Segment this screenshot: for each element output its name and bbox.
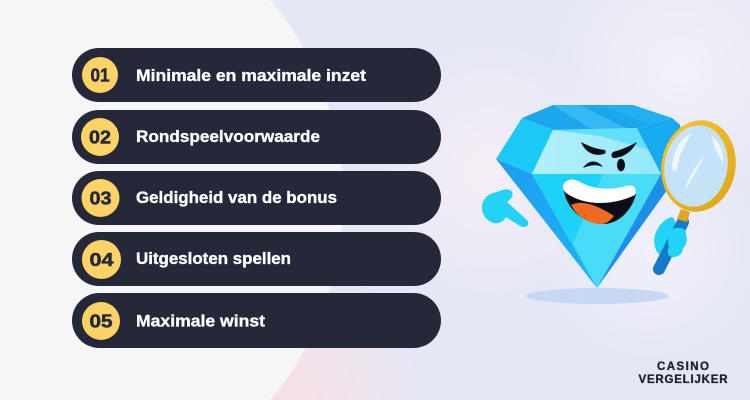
top band [522,105,680,130]
right upper facet [637,118,684,174]
list row 3: Geldigheid van de bonus [136,188,337,207]
shadow under diamond [526,288,668,304]
main lower facet [532,174,661,288]
magnifier [654,114,743,218]
left lower strip [496,159,597,288]
diamond body [496,105,684,288]
list row 2: 02 [89,127,111,147]
face: mouth [563,179,636,224]
list row 5: 05 [90,311,112,331]
list row 4: Uitgesloten spellen [136,249,291,268]
left light panel [0,0,343,400]
list row 4: 04 [90,250,114,270]
centre pale facet [532,128,661,174]
right lower strip [597,172,680,288]
list row 1 [72,48,441,102]
left upper facet [496,118,553,174]
list row 5: Maximale winst [136,312,265,330]
list row 5 [72,293,441,348]
logo text [638,361,728,386]
list row 1: 01 [90,65,110,85]
illustration: diamond mascot with magnifier [482,105,743,304]
list row 3 [72,171,441,225]
list row 2 [72,110,441,164]
list row 1: Minimale en maximale inzet [136,66,366,85]
face: eyebrows and eyes [581,142,637,171]
list row 3: 03 [90,188,112,208]
logo text: VERGELIJKER [638,374,728,386]
list row 4 [72,232,441,286]
left hand pointing [482,189,528,227]
list row 2: Rondspeelvoorwaarde [136,127,320,146]
right hand with handle [654,209,690,269]
logo text: CASINO [657,361,709,373]
